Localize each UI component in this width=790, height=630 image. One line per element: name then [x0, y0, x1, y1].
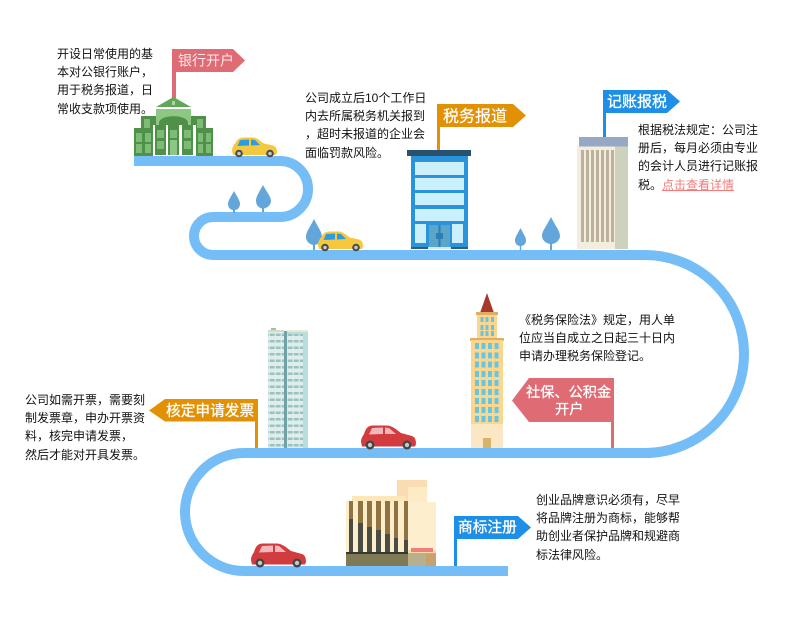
- flag: 银行开户: [172, 49, 245, 98]
- text: bank account: 本对公银行账户，: [57, 65, 153, 79]
- text: bookkeeping: 税。点击查看详情: [638, 178, 734, 192]
- text: invoice: [25, 393, 145, 462]
- text: tax report: 公司成立后10个工作日: [305, 91, 426, 105]
- text: social insurance: 申请办理税务保险登记。: [519, 349, 651, 363]
- icon: clock tower: [470, 293, 504, 448]
- icon: hotel building: [346, 480, 436, 566]
- text: invoice: 料，核完申请发票，: [25, 429, 133, 443]
- icon: red car upper: [361, 426, 416, 450]
- text: trademark: 创业品牌意识必须有，尽早: [536, 493, 680, 507]
- text: bookkeeping: 根据税法规定：公司注: [638, 123, 758, 137]
- icon: blue office building: [407, 150, 471, 249]
- flag: 核定申请发票: [149, 399, 258, 448]
- text: social insurance: [519, 313, 675, 363]
- text: invoice: 公司如需开票，需要刻: [25, 393, 145, 407]
- text: social insurance: 位应当自成立之日起三十日内: [519, 331, 675, 345]
- flag: 社保、公积金开户: [512, 378, 614, 448]
- icon: red car lower: [251, 544, 306, 568]
- flag: 记账报税: [603, 90, 680, 137]
- icon: glass skyscraper: [268, 328, 308, 448]
- text: bank account: 用于税务报道，日: [57, 83, 153, 97]
- tree 5: [542, 217, 560, 250]
- flag: 商标注册: 商标注册: [458, 519, 517, 536]
- text: tax report: 内去所属税务机关报到: [305, 109, 425, 123]
- text: bookkeeping: 的会计人员进行记账报: [638, 159, 758, 173]
- icon: bank building: [134, 97, 213, 156]
- flag: 税务报道: [437, 104, 526, 150]
- text: bookkeeping: 册后，每月必须由专业: [638, 141, 758, 155]
- tree 3: [306, 219, 322, 250]
- flag: 税务报道: 税务报道: [443, 108, 507, 126]
- text: trademark: 将品牌注册为商标，能够帮: [536, 511, 680, 525]
- text: bank account: 常收支款项使用。: [57, 102, 153, 116]
- tree 1: [228, 191, 240, 213]
- text: tax report: ，超时未报道的企业会: [305, 127, 425, 141]
- tree 4: [515, 228, 526, 250]
- icon: beige tower: [577, 137, 628, 249]
- flag: 社保、公积金开户: 开户: [555, 401, 583, 418]
- flag: 核定申请发票: 核定申请发票: [166, 402, 254, 420]
- text: trademark: [536, 493, 680, 562]
- text: tax report: 面临罚款风险。: [305, 146, 389, 160]
- flag: 商标注册: [454, 516, 531, 566]
- text: invoice: 制发票章，申办开票资: [25, 411, 145, 425]
- flag: 记账报税: 记账报税: [607, 94, 667, 110]
- text: trademark: 助创业者保护品牌和规避商: [536, 529, 680, 543]
- text: tax report: [305, 91, 426, 160]
- icon: yellow car middle: [318, 232, 363, 251]
- tree 2: [256, 185, 271, 212]
- text: invoice: 然后才能对开具发票。: [25, 448, 145, 462]
- text: social insurance: 《税务保险法》规定，用人单: [519, 313, 675, 327]
- flag: 社保、公积金开户: 社保、公积金: [526, 385, 611, 401]
- text: bank account: 开设日常使用的基: [57, 47, 153, 61]
- text: bank account: [57, 47, 153, 116]
- text: trademark: 标法律风险。: [536, 548, 608, 562]
- flag: 银行开户: 银行开户: [178, 52, 234, 68]
- text: bookkeeping: [638, 123, 758, 192]
- road: [134, 161, 744, 571]
- icon: yellow car top: [232, 138, 277, 157]
